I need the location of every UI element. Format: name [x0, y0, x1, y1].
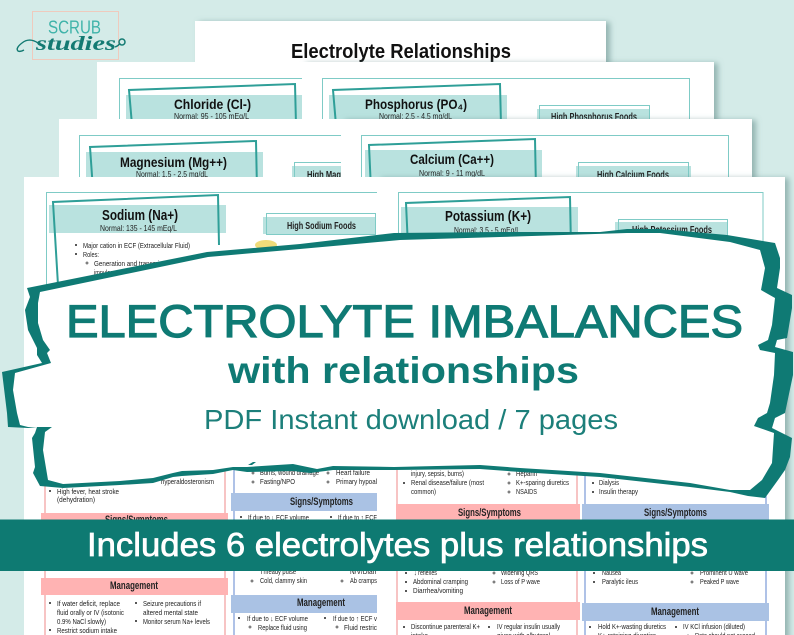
sodium causes and panels: If due to ↑ ECF — [338, 513, 377, 522]
potassium causes and panels: K+-sparing diuretics — [516, 478, 569, 487]
sodium role list — [75, 241, 190, 277]
potassium causes and panels: Loss of P wave — [501, 577, 540, 586]
sodium causes and panels: Cold, clammy skin — [260, 576, 307, 585]
page: Magnesium: Normal: 1.5 - 2.5 mg/dL — [136, 169, 208, 179]
potassium causes and panels: Prominent U wave — [700, 568, 748, 577]
banner subtitle: with relationships — [227, 350, 579, 391]
logo: Scrub Studies: SCRUB — [48, 18, 101, 38]
potassium causes and panels: NSAIDS — [516, 487, 537, 496]
page: Magnesium — [59, 119, 341, 199]
page: Calcium: Calcium (Ca++) — [410, 151, 494, 167]
page: Potassium: High Potassium Foods — [632, 225, 712, 236]
sodium causes and panels: Replace fluid using — [258, 623, 307, 632]
potassium causes and panels: Renal disease/failure (most — [411, 478, 484, 487]
potassium causes and panels: Discontinue parenteral K+ — [411, 622, 480, 631]
bottom band — [0, 520, 794, 571]
page: Sodium: High Sodium Foods — [287, 221, 356, 232]
sodium causes and panels — [41, 468, 377, 635]
sodium causes and panels: High fever, heat stroke — [57, 487, 119, 496]
potassium causes and panels: ↓ reflexes — [414, 568, 437, 577]
page: Electrolyte Relationships — [195, 21, 606, 81]
sodium causes and panels: Heart failure — [336, 468, 370, 477]
page: Electrolyte Relationships: Electrolyte Relationships — [291, 41, 511, 63]
potassium causes and panels: injury, sepsis, burns) — [411, 469, 464, 478]
sodium causes and panels: 0.9% NaCl slowly) — [57, 617, 106, 626]
sodium causes and panels: Signs/Symptoms — [105, 514, 168, 526]
potassium causes and panels: Heparin — [516, 469, 537, 478]
page: Sodium: Sodium (Na+) — [102, 207, 178, 224]
icon: cheese food — [255, 240, 277, 250]
sodium causes and panels: Restrict sodium intake — [57, 626, 117, 635]
band text: Includes 6 electrolytes plus relationships — [87, 526, 708, 563]
potassium causes and panels: Nausea — [602, 568, 622, 577]
potassium causes and panels: Dialysis — [599, 478, 619, 487]
potassium causes and panels: Insulin therapy — [599, 487, 638, 496]
sodium causes and panels: If due to ↑ ECF v — [333, 614, 377, 623]
logo: Scrub Studies — [17, 12, 125, 60]
page: Phosphorus: High Phosphorus Foods — [551, 112, 637, 123]
sodium causes and panels: If water deficit, replace — [57, 599, 120, 608]
potassium causes and panels: Management — [651, 606, 699, 618]
sodium causes and panels: Fasting/NPO — [260, 477, 295, 486]
sodium causes and panels: hyperaldosteronism — [161, 477, 214, 486]
potassium causes and panels: common) — [411, 487, 436, 496]
sodium causes and panels: Ab cramps — [350, 576, 377, 585]
potassium causes and panels: Peaked P wave — [700, 577, 739, 586]
logo: Scrub Studies: studies — [35, 33, 116, 55]
potassium causes and panels: Signs/Symptoms — [458, 507, 521, 519]
potassium causes and panels: Abdominal cramping — [413, 577, 468, 586]
page: Calcium: High Calcium Foods — [597, 170, 669, 181]
page: Magnesium: High Mag — [307, 170, 341, 181]
page: Phosphorus: Normal: 2.5 - 4.5 mg/dL — [379, 111, 452, 121]
sodium causes and panels: Burns, wound drainage — [260, 468, 319, 477]
potassium causes and panels: IV KCl infusion (diluted) — [683, 622, 745, 631]
page: Chloride: Chloride (Cl-) — [174, 96, 251, 112]
sodium causes and panels: If due to ↓ ECF volume — [247, 614, 308, 623]
sodium role list: Roles: — [83, 250, 99, 259]
sodium causes and panels: Primary hypoal — [336, 477, 377, 486]
page: Phosphorus — [302, 62, 714, 142]
potassium causes and panels — [396, 460, 769, 635]
sodium role list: Major cation in ECF (Extracellular Fluid) — [83, 241, 190, 250]
potassium causes and panels: Management — [464, 605, 512, 617]
page: Chloride: Normal: 95 - 105 mEq/L — [174, 111, 249, 121]
sodium causes and panels: altered mental state — [143, 608, 198, 617]
sodium role list: impulses — [94, 268, 116, 277]
page: Phosphorus: Phosphorus (PO₄) — [365, 96, 467, 112]
banner title: ELECTROLYTE IMBALANCES — [66, 296, 743, 347]
potassium causes and panels: Signs/Symptoms — [644, 507, 707, 519]
potassium causes and panels: IV regular insulin usually — [497, 622, 560, 631]
page: Potassium: Normal: 3.5 - 5 mEq/L — [454, 225, 520, 235]
potassium causes and panels: Widening QRS — [501, 568, 538, 577]
page: Potassium — [377, 177, 785, 635]
potassium causes and panels: Paralytic ileus — [602, 577, 638, 586]
sodium causes and panels: (dehydration) — [57, 495, 95, 504]
banner: brushed white shape with teal edge — [2, 229, 793, 498]
sodium causes and panels: Seizure precautions if — [143, 599, 202, 608]
page: Sodium — [24, 177, 377, 635]
page: Calcium — [341, 119, 752, 199]
page: Magnesium: Magnesium (Mg++) — [120, 154, 227, 170]
page: Chloride — [97, 62, 302, 142]
banner edge fragment — [248, 462, 256, 465]
sodium causes and panels: Signs/Symptoms — [290, 496, 353, 508]
sodium causes and panels: fluid orally or IV (isotonic — [57, 608, 124, 617]
sodium causes and panels: Management — [110, 580, 158, 592]
page: Calcium: Normal: 9 - 11 mg/dL — [419, 168, 485, 178]
potassium causes and panels: Hold K+-wasting diuretics — [598, 622, 666, 631]
sodium causes and panels: N/V/Diarr — [350, 567, 377, 576]
potassium causes and panels: Diarrhea/vomiting — [413, 586, 463, 595]
page: Sodium: Normal: 135 - 145 mEq/L — [100, 223, 177, 233]
sodium role list: Generation and transmission — [94, 259, 174, 268]
sodium causes and panels: If due to ↓ ECF volume — [248, 513, 309, 522]
page: Potassium: Potassium (K+) — [445, 209, 531, 225]
sodium causes and panels: Monitor serum Na+ levels — [143, 617, 210, 626]
sodium causes and panels: Fluid restric — [344, 623, 377, 632]
sodium causes and panels: Management — [297, 597, 345, 609]
sodium causes and panels: Thready pulse — [260, 567, 296, 576]
banner note: PDF Instant download / 7 pages — [204, 404, 618, 435]
